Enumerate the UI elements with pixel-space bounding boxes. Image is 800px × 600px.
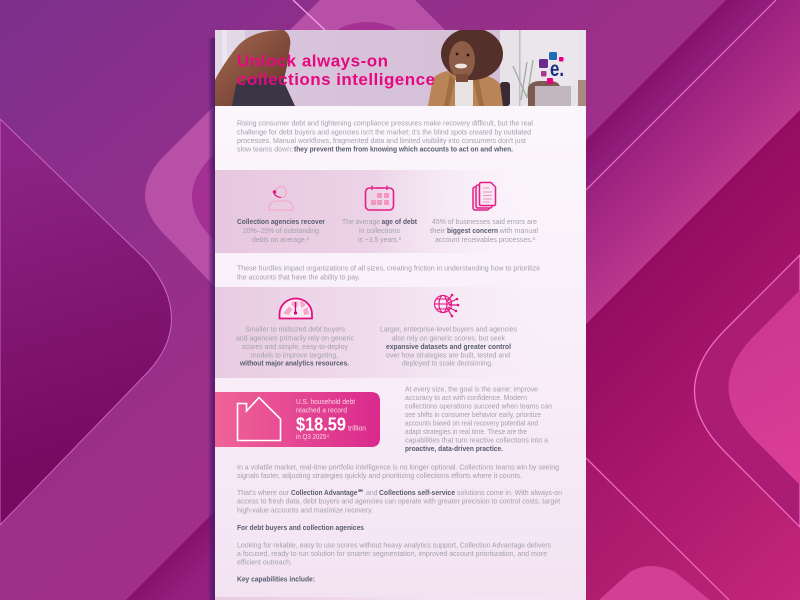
- stat: age of debt: age of debt: [382, 217, 418, 226]
- stat: debt figure: $18.59: [296, 414, 346, 434]
- title: Unlock always-on: [237, 52, 388, 70]
- text: solutions: and: [366, 488, 378, 497]
- text: collection advantage: [237, 540, 551, 566]
- stat: recovery: Collection agencies recover: [237, 217, 325, 226]
- panel: buyer segments: [215, 287, 570, 378]
- icon: logo: e.: [550, 58, 564, 81]
- stat: debt figure: [296, 397, 366, 441]
- text: larger buyers: also rely on generic scores, but seek: [392, 333, 505, 342]
- text: smaller buyers: without major analytics resources.: [239, 359, 349, 368]
- icon: logo: [539, 52, 564, 84]
- text: solutions: access to fresh data, debt buyers and agencies can operate with greater precision to control costs, target: [237, 496, 560, 505]
- stat: errors: account receivables processes.³: [435, 235, 536, 244]
- stat: errors: with manual: [499, 226, 538, 235]
- title: collections intelligence: [237, 70, 435, 89]
- text: smaller buyers: scores and simple, easy-to-deploy: [242, 342, 348, 351]
- stat: errors: 45% of businesses said errors are: [432, 217, 537, 226]
- text: hurdles: [237, 264, 540, 281]
- panel: hurdle statistics: [215, 170, 538, 253]
- stat: errors: biggest concern: [447, 226, 498, 235]
- icon: documents: [473, 182, 496, 210]
- stat: recovery: [237, 217, 325, 244]
- text: volatile market: [237, 463, 559, 480]
- text: smaller buyers: models to improve targeting,: [251, 350, 338, 359]
- icon: calendar: [366, 186, 394, 210]
- intro paragraph: Rising consumer debt and tightening compliance pressures make recovery difficult, but the real: [237, 119, 533, 128]
- callout: household debt: [215, 392, 380, 447]
- text: hurdles: the accounts that have the ability to pay.: [237, 272, 360, 281]
- text: solutions: solutions come in. With always-on: [457, 488, 562, 497]
- text: smaller buyers: [236, 325, 354, 368]
- text: hurdles: These hurdles impact organizations of all sizes, creating friction in understanding how to prioritize: [237, 264, 540, 273]
- stat: debt figure: trillion: [348, 423, 366, 432]
- stat: age of debt: [342, 217, 418, 244]
- panel: document card: [215, 28, 586, 600]
- panel: capabilities strip: [215, 597, 586, 600]
- text: larger buyers: over how strategies are built, tested and: [386, 350, 510, 359]
- text: collection advantage: efficient outreach.: [237, 557, 292, 566]
- stat: age of debt: in collections: [359, 226, 400, 235]
- title: [237, 52, 435, 89]
- heading: key capabilities: Key capabilities include:: [237, 574, 315, 583]
- stat: recovery: 20%–25% of outstanding: [243, 226, 319, 235]
- icon: house: [238, 398, 280, 440]
- text: goal paragraph: [405, 385, 552, 453]
- stat: debt figure: in Q3 2025⁴: [296, 432, 329, 441]
- stat: debt figure: reached a record: [296, 405, 347, 414]
- text: solutions: high-value accounts and maximize recovery.: [237, 505, 373, 514]
- text: solutions: Collections self-service: [379, 488, 455, 497]
- text: larger buyers: expansive datasets and greater control: [386, 342, 511, 351]
- text: collection advantage: Looking for reliable, easy to use scores without heavy analytics support, Collection Advantage delivers: [237, 540, 551, 549]
- text: solutions: That's where our: [237, 488, 290, 497]
- stat: errors: their: [430, 226, 446, 235]
- heading: debt buyers: For debt buyers and collection agenices: [237, 523, 364, 532]
- intro paragraph: challenge for debt buyers and agencies isn't the market; it's the blind spots created by outdated: [237, 127, 531, 136]
- text: smaller buyers: Smaller to midsized debt buyers: [245, 325, 345, 334]
- text: smaller buyers: and agencies primarily rely on generic: [236, 333, 354, 342]
- text: goal paragraph: accuracy to act with confidence. Modern: [405, 393, 527, 402]
- text: goal paragraph: capabilities that turn reactive collections into a: [405, 436, 549, 445]
- intro paragraph: they prevent them from knowing which accounts to act on and when.: [294, 145, 513, 154]
- intro paragraph: slow teams down;: [237, 145, 293, 154]
- text: larger buyers: deployed to scale decisioning.: [402, 359, 493, 368]
- header banner: [215, 28, 586, 106]
- icon: headset agent: [269, 186, 293, 210]
- stat: age of debt: is ~3.5 years.²: [358, 235, 402, 244]
- text: goal paragraph: see shifts in consumer behavior early, prioritize: [405, 410, 541, 419]
- text: goal paragraph: collections operations succeed when teams can: [405, 402, 552, 411]
- stat: age of debt: The average: [342, 217, 380, 226]
- stat: errors: [430, 217, 538, 244]
- intro paragraph: processes. Manual workflows, fragmented data and limited visibility into consumers don't just: [237, 136, 526, 145]
- stat: debt figure: U.S. household debt: [296, 397, 355, 406]
- icon: gauge: [280, 298, 312, 318]
- stat: recovery: debts on average.¹: [252, 235, 310, 244]
- text: volatile market: In a volatile market, real-time portfolio intelligence is no longer optional. Collections teams win by seeing: [237, 463, 559, 472]
- text: volatile market: signals faster, adjusting strategies quickly and prioritizing collections efforts where it counts.: [237, 471, 522, 480]
- text: goal paragraph: adapt strategies in real time. These are the: [405, 427, 527, 436]
- text: goal paragraph: accounts based on real recovery potential and: [405, 419, 538, 428]
- text: solutions: [237, 488, 562, 514]
- text: collection advantage: a focused, ready to run solution for smarter segmentation, improved account prioritization, and more: [237, 549, 547, 558]
- text: goal paragraph: At every size, the goal is the same: improve: [405, 385, 538, 394]
- icon: data globe: [434, 294, 459, 317]
- text: larger buyers: Larger, enterprise-level buyers and agencies: [380, 325, 517, 334]
- text: goal paragraph: proactive, data-driven practice.: [405, 444, 503, 453]
- text: solutions: Collection Advantage℠: [291, 488, 364, 497]
- intro paragraph: [237, 119, 533, 154]
- text: larger buyers: [380, 325, 517, 368]
